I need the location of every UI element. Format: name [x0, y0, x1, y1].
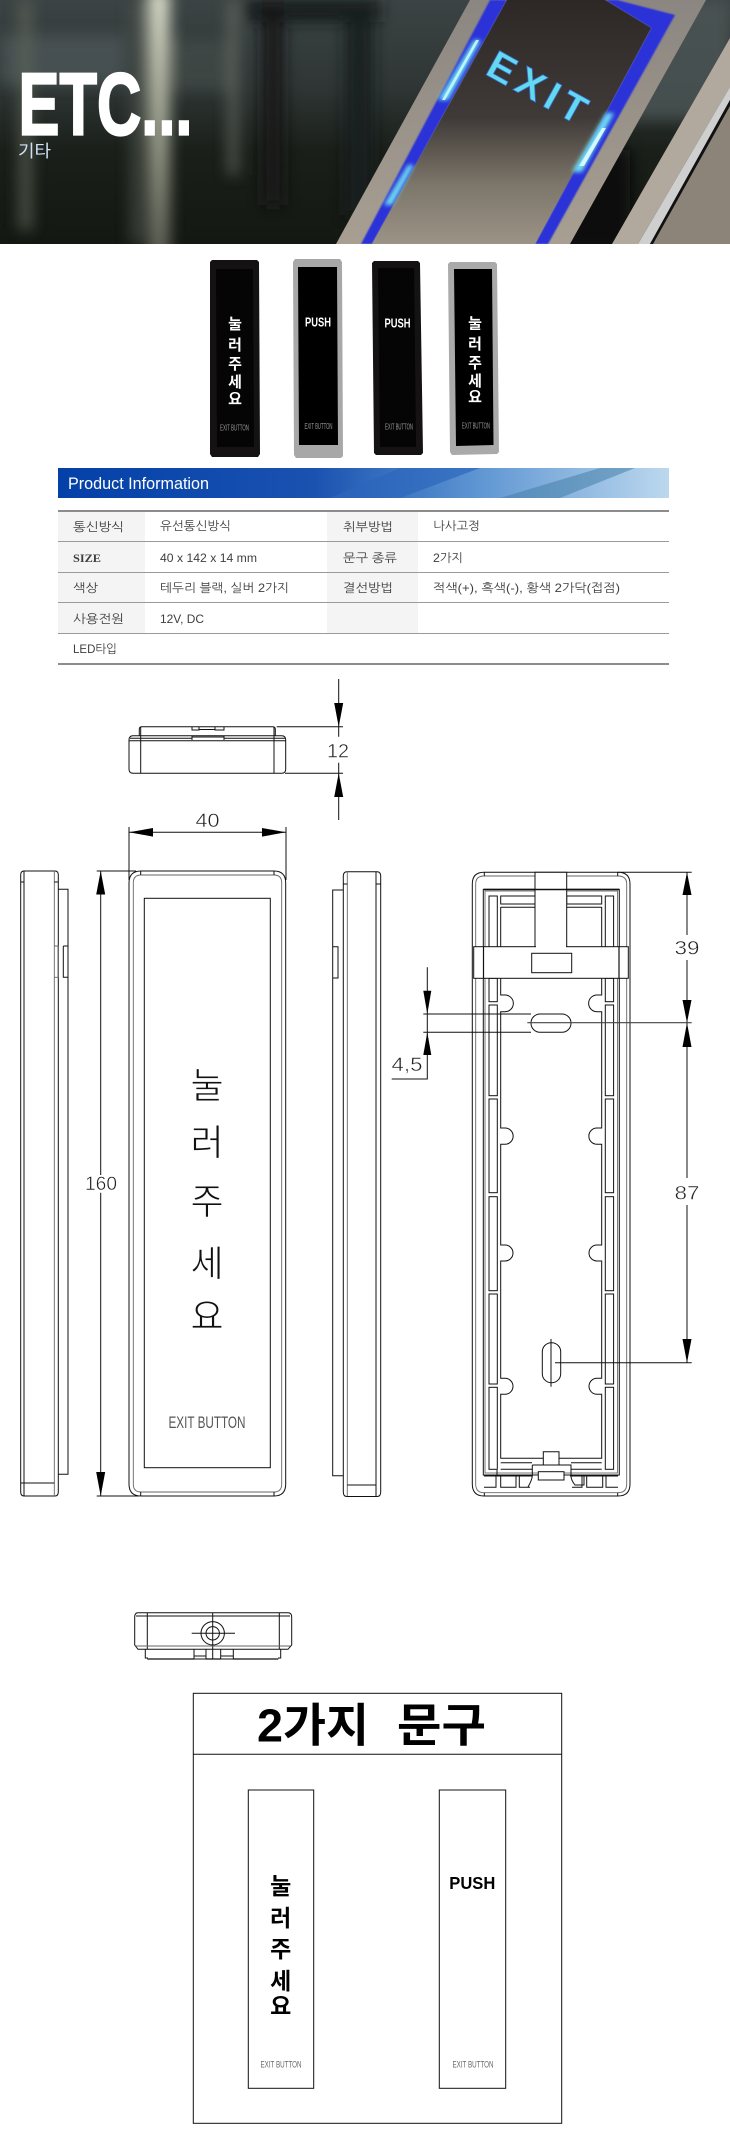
drawing: bottom view — [135, 1613, 292, 1659]
photo: black button Korean: 눌 — [228, 313, 242, 334]
photo: black button Korean: EXIT BUTTON — [220, 424, 249, 432]
photo: silver button PUSH — [293, 259, 343, 458]
dimension: 12 — [277, 679, 349, 820]
photo: black button Korean: 세 — [228, 371, 242, 392]
front legend: EXIT BUTTON: EXIT BUTTON — [168, 1413, 246, 1432]
drawing: top view — [129, 727, 286, 773]
dimension: 12: 12 — [327, 742, 349, 762]
product information bar — [58, 468, 669, 498]
subtitle: 기타: 기타 — [18, 137, 51, 162]
drawing: left side view — [21, 871, 68, 1496]
second plate edge — [612, 38, 730, 244]
front legend: Korean text: 러 — [190, 1114, 224, 1166]
strap and band — [535, 872, 567, 948]
photo: silver button Korean: 눌 — [468, 312, 482, 334]
photo: black button PUSH: PUSH — [384, 316, 410, 330]
photo: black button Korean — [210, 260, 260, 457]
specification table: 사용전원 — [73, 612, 124, 626]
photo: silver button Korean: 세 — [468, 370, 482, 391]
dimension: 160: 160 — [85, 1174, 117, 1195]
dimension: 160 — [85, 871, 139, 1496]
plate: Korean phrase: 요 — [270, 1987, 291, 2021]
specification table: 취부방법 — [343, 520, 393, 534]
photo: black button PUSH: EXIT BUTTON — [385, 422, 413, 432]
front legend: Korean text — [190, 1057, 224, 1340]
drawing: front view — [129, 871, 286, 1496]
photo: silver button PUSH: EXIT BUTTON — [304, 422, 333, 431]
drawing: right side view — [333, 872, 381, 1496]
plate: Korean phrase: EXIT BUTTON — [260, 2060, 302, 2070]
blue light glow — [384, 40, 614, 205]
photo: silver button Korean: 요 — [468, 386, 482, 407]
specification table: LED타입 — [73, 642, 117, 656]
plate: PUSH phrase: PUSH — [449, 1873, 495, 1893]
dimension: 39 — [618, 872, 700, 1023]
photo: silver button Korean: 러 — [468, 333, 482, 354]
dimension: 40 — [129, 811, 286, 880]
plate: PUSH phrase: EXIT BUTTON — [452, 2060, 494, 2070]
front legend: Korean text: 눌 — [190, 1057, 224, 1109]
photo: silver button PUSH: PUSH — [305, 314, 331, 330]
rails — [489, 896, 614, 1469]
plate: Korean phrase: 세 — [270, 1962, 291, 1996]
photo: black button PUSH — [372, 261, 423, 455]
heading: 2가지 문구 — [257, 1700, 486, 1752]
front legend: Korean text: 세 — [190, 1235, 224, 1287]
specification table — [58, 511, 669, 664]
inner wall with bumps — [501, 907, 602, 1458]
plate: PUSH phrase — [439, 1790, 506, 2088]
specification table: 테두리 블랙, 실버 2가지 — [160, 581, 289, 595]
specification table: 나사고정 — [433, 519, 480, 533]
dimension: 4,5 — [392, 967, 531, 1079]
product photos — [210, 259, 499, 458]
specification table: 문구 종류 — [343, 551, 397, 565]
title: ETC: ETC... — [18, 54, 192, 154]
plate: Korean phrase: 눌 — [270, 1867, 291, 1901]
product information bar: Product Information — [68, 474, 209, 493]
heading: 2가지 문구: 2가지 — [257, 1700, 369, 1752]
specification table: 12V, DC — [160, 612, 204, 626]
specification table: 통신방식 — [73, 520, 124, 534]
plate: Korean phrase: 러 — [270, 1899, 291, 1933]
slots — [531, 1014, 571, 1032]
specification table: 유선통신방식 — [160, 519, 231, 533]
plate: Korean phrase: 주 — [270, 1930, 291, 1964]
specification table: 2가지 — [433, 551, 463, 565]
specification table: 적색(+), 흑색(-), 황색 2가닥(접점) — [433, 581, 620, 595]
heading: 2가지 문구: 문구 — [397, 1700, 486, 1752]
front legend: Korean text: 요 — [190, 1288, 224, 1340]
photo: black button Korean: 주 — [228, 353, 242, 374]
dimension: 39: 39 — [674, 938, 700, 960]
photo: silver button Korean: EXIT BUTTON — [462, 422, 490, 430]
blurred background — [0, 0, 730, 260]
specification table: SIZE — [73, 551, 101, 565]
plate: Korean phrase — [248, 1790, 314, 2088]
exit plate — [336, 0, 706, 244]
specification table: 결선방법 — [343, 581, 393, 595]
panel: two phrases — [193, 1693, 562, 2123]
photo: silver button Korean: 주 — [468, 352, 482, 373]
dimension: 40: 40 — [196, 811, 220, 832]
photo: black button Korean: 요 — [228, 388, 242, 409]
dimension: 4,5: 4,5 — [392, 1055, 422, 1076]
front legend: Korean text: 주 — [190, 1173, 224, 1225]
text: EXIT: EXIT — [480, 43, 601, 137]
photo: silver button Korean — [448, 262, 499, 455]
hero banner — [0, 0, 730, 260]
photo: black button Korean: 러 — [228, 334, 242, 355]
dimension: 87: 87 — [674, 1184, 700, 1204]
bottom clip — [543, 1452, 559, 1465]
specification table: 40 x 142 x 14 mm — [160, 551, 257, 565]
specification table: 색상 — [73, 581, 98, 595]
drawing: back view — [472, 872, 630, 1496]
dimension: 87 — [527, 1023, 700, 1363]
